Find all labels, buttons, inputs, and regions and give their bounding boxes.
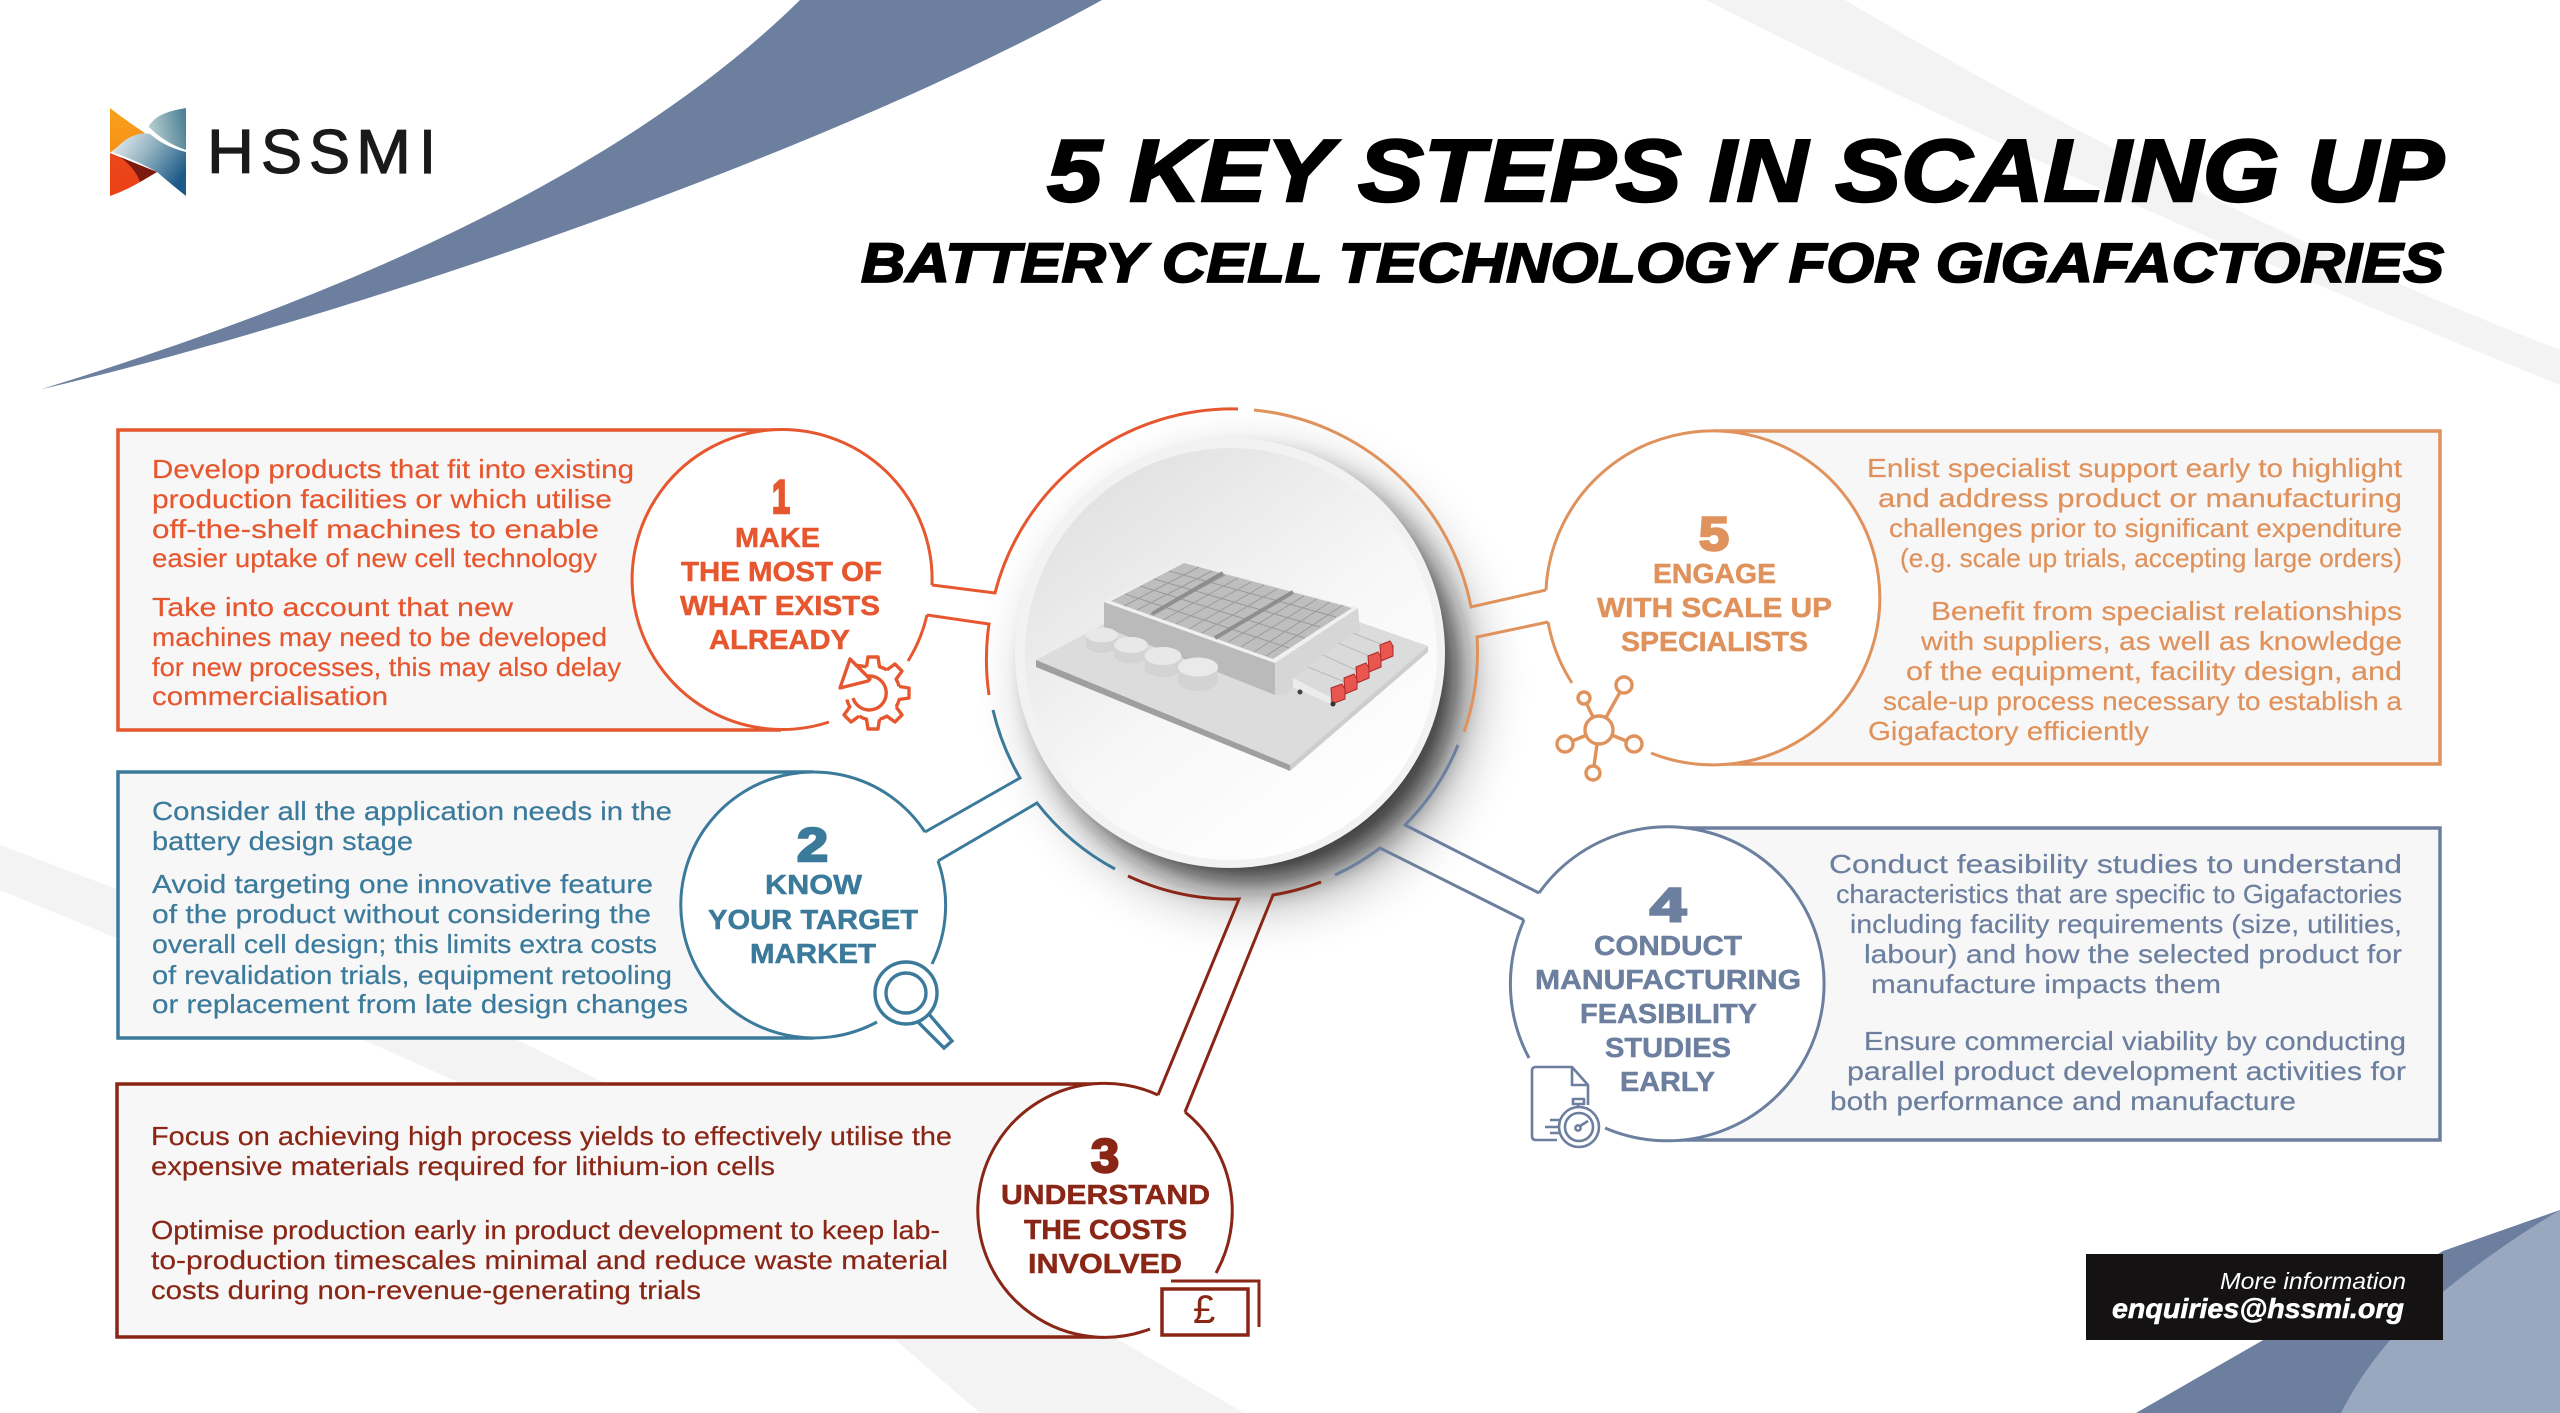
panel 3 body text: Optimise production early in product development to keep lab- — [151, 1215, 940, 1245]
panel 4 circle — [1510, 827, 1824, 1141]
panel 4 body text — [1829, 849, 2406, 1116]
panel 1 heading: MAKE — [735, 522, 820, 553]
panel 3 body text: to-production timescales minimal and reduce waste material — [151, 1245, 948, 1275]
panel 4 heading — [1535, 878, 1801, 1097]
panel 5 body text — [1867, 453, 2403, 746]
panel 5 body text: (e.g. scale up trials, accepting large orders) — [1900, 543, 2402, 573]
panel 2 heading: KNOW — [765, 869, 863, 900]
panel 4 heading: EARLY — [1620, 1066, 1715, 1097]
panel 4 body text: Ensure commercial viability by conducting — [1864, 1026, 2406, 1056]
panel 2 body text — [152, 796, 688, 1019]
panel 3 heading: UNDERSTAND — [1001, 1179, 1210, 1210]
factory illustration — [1036, 562, 1428, 771]
contact box — [2086, 1254, 2443, 1340]
icon: banknotes with pound sign: £ — [1193, 1288, 1215, 1332]
panel 1 body text: commercialisation — [152, 681, 388, 711]
contact email: enquiries@hssmi.org — [2112, 1293, 2404, 1324]
logo wordmark: S — [261, 118, 302, 187]
panel 5 heading — [1597, 507, 1832, 657]
logo wordmark — [207, 118, 436, 187]
contact label: More information — [2220, 1268, 2406, 1294]
panel 2 body text: Consider all the application needs in the — [152, 796, 672, 826]
panel 1 body text: Develop products that fit into existing — [152, 454, 634, 484]
panel 5 body text: Benefit from specialist relationships — [1931, 596, 2402, 626]
panel 1 body text: off-the-shelf machines to enable — [152, 514, 599, 544]
panel 2 body text: overall cell design; this limits extra costs — [152, 929, 657, 959]
panel 4 body text: both performance and manufacture — [1830, 1086, 2296, 1116]
medallion shadow — [1039, 466, 1469, 897]
panel 4 body text: manufacture impacts them — [1871, 969, 2221, 999]
panel 3 connector ring — [1128, 876, 1321, 1112]
panel 1 body text: machines may need to be developed — [152, 622, 607, 652]
storage tanks — [1086, 628, 1218, 691]
main heading: 5 KEY STEPS IN SCALING UP — [1047, 121, 2444, 220]
panel 2 body text: or replacement from late design changes — [152, 989, 688, 1019]
panel 2 heading: YOUR TARGET — [708, 904, 918, 935]
panel 1 circle — [631, 430, 932, 730]
icon: document with stopwatch — [1532, 1067, 1599, 1147]
truck trailers — [1293, 633, 1387, 704]
medallion disc — [1015, 438, 1445, 868]
icon: banknotes with pound sign — [1162, 1281, 1259, 1335]
panel 1 body text — [152, 454, 634, 711]
panel 3 circle — [978, 1083, 1232, 1337]
logo wordmark: S — [309, 118, 350, 187]
logo mark — [110, 108, 186, 196]
panel 5 body text: scale-up process necessary to establish a — [1883, 686, 2403, 716]
step 1 panel — [118, 409, 1238, 730]
panel 5 body text: with suppliers, as well as knowledge — [1920, 626, 2402, 656]
panel 2 connector ring — [925, 710, 1115, 869]
panel 3 heading — [1001, 1129, 1210, 1279]
panel 4 heading: FEASIBILITY — [1580, 998, 1757, 1029]
panel 5 heading: 5 — [1699, 507, 1729, 560]
logo: HSSMI — [110, 108, 436, 196]
panel 2 body text: battery design stage — [152, 826, 413, 856]
panel 2 background — [118, 772, 813, 1038]
panel 1 connector ring — [927, 409, 1238, 695]
panel 5 body text: Enlist specialist support early to highlight — [1867, 453, 2403, 483]
panel 1 background — [118, 430, 781, 730]
panel 5 heading: SPECIALISTS — [1621, 626, 1808, 657]
panel 5 circle — [1546, 430, 1881, 765]
panel 2 heading — [708, 818, 918, 969]
panel 2 circle — [680, 772, 946, 1038]
panel 1 body text: Take into account that new — [152, 592, 513, 622]
sub heading: BATTERY CELL TECHNOLOGY FOR GIGAFACTORIES — [861, 231, 2444, 294]
panel 3 heading: THE COSTS — [1024, 1214, 1187, 1245]
panel 5 body text: of the equipment, facility design, and — [1906, 656, 2402, 686]
panel 2 body text: Avoid targeting one innovative feature — [152, 869, 653, 899]
panel 4 heading: CONDUCT — [1594, 930, 1742, 961]
step 2 panel — [118, 710, 1115, 1048]
panel 5 body text: challenges prior to significant expenditure — [1889, 513, 2402, 543]
step 4 panel — [1335, 745, 2440, 1147]
panel 3 heading: INVOLVED — [1028, 1248, 1182, 1279]
panel 4 body text: characteristics that are specific to Gigafactories — [1836, 879, 2402, 909]
panel 3 body text: costs during non-revenue-generating trials — [151, 1275, 701, 1305]
icon: network nodes — [1557, 677, 1642, 780]
logo wordmark: M — [356, 118, 411, 187]
panel 4 heading: 4 — [1650, 878, 1686, 931]
background swoosh: bottom right — [2136, 1210, 2560, 1413]
panel 1 heading: ALREADY — [709, 624, 850, 655]
icon: magnifying glass — [875, 962, 952, 1048]
panel 4 body text: parallel product development activities for — [1847, 1056, 2406, 1086]
background swoosh: top right grey — [1706, 0, 2560, 385]
panel 1 heading: 1 — [772, 470, 790, 523]
panel 1 heading: WHAT EXISTS — [680, 590, 880, 621]
panel 4 heading: MANUFACTURING — [1535, 964, 1801, 995]
panel 1 heading: THE MOST OF — [681, 556, 882, 587]
logo wordmark: I — [419, 118, 436, 187]
panel 1 body text: for new processes, this may also delay — [152, 652, 621, 682]
panel 2 body text: of revalidation trials, equipment retooling — [152, 960, 672, 990]
panel 4 heading: STUDIES — [1605, 1032, 1731, 1063]
panel 1 body text: easier uptake of new cell technology — [152, 543, 597, 573]
panel 2 heading: 2 — [797, 818, 828, 871]
step 3 panel — [117, 876, 1321, 1337]
panel 5 heading: WITH SCALE UP — [1597, 592, 1832, 623]
step 5 panel — [1254, 410, 2440, 780]
background swoosh: lower left grey — [0, 845, 1244, 1413]
background swoosh: top blue — [42, 0, 1102, 389]
contact background — [2086, 1254, 2443, 1340]
panel 4 connector ring — [1335, 745, 1539, 920]
panel 4 body text: labour) and how the selected product for — [1864, 939, 2402, 969]
panel 5 body text: Gigafactory efficiently — [1868, 716, 2149, 746]
panel 5 heading: ENGAGE — [1653, 558, 1776, 589]
panel 3 body text: Focus on achieving high process yields to effectively utilise the — [151, 1121, 952, 1151]
panel 5 connector ring — [1254, 410, 1548, 732]
panel 1 heading — [680, 470, 882, 655]
panel 4 body text: including facility requirements (size, utilities, — [1850, 909, 2402, 939]
icon: gear with arrow — [838, 657, 909, 729]
panel 3 body text — [151, 1121, 952, 1305]
red truck cabs — [1330, 641, 1393, 706]
panel 3 body text: expensive materials required for lithium-ion cells — [151, 1151, 775, 1181]
factory base slab — [1036, 569, 1428, 771]
panel 5 body text: and address product or manufacturing — [1878, 483, 2402, 513]
logo wordmark: H — [207, 118, 254, 187]
title — [861, 121, 2444, 294]
panel 1 body text: production facilities or which utilise — [152, 484, 612, 514]
factory building — [1104, 562, 1360, 695]
panel 4 background — [1667, 828, 2440, 1140]
central factory medallion — [1015, 438, 1469, 897]
panel 5 background — [1714, 431, 2440, 764]
panel 3 heading: 3 — [1091, 1129, 1119, 1182]
panel 4 body text: Conduct feasibility studies to understand — [1829, 849, 2402, 879]
panel 2 heading: MARKET — [750, 938, 876, 969]
panel 3 background — [117, 1084, 1105, 1337]
panel 2 body text: of the product without considering the — [152, 899, 651, 929]
